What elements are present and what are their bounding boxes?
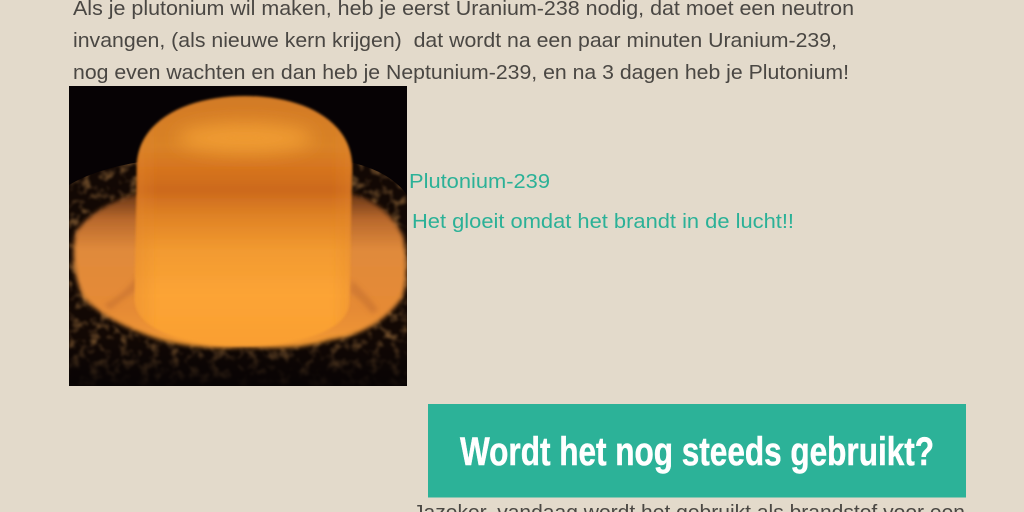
dark ash surround xyxy=(69,150,407,386)
heading banner xyxy=(428,404,966,498)
intro paragraph xyxy=(73,0,854,84)
cylinder xyxy=(135,96,352,346)
intro paragraph: invangen, (als nieuwe kern krijgen) dat wordt na een paar minuten Uranium-239, xyxy=(73,29,837,52)
glowing plate xyxy=(74,194,406,348)
caption: why it glows: Het gloeit omdat het brandt in de lucht!! xyxy=(412,210,794,233)
caption: Plutonium-239: Plutonium-239 xyxy=(409,170,550,193)
photo: glowing plutonium pellet xyxy=(69,86,407,386)
intro paragraph: nog even wachten en dan heb je Neptunium-239, en na 3 dagen heb je Plutonium! xyxy=(73,61,849,84)
